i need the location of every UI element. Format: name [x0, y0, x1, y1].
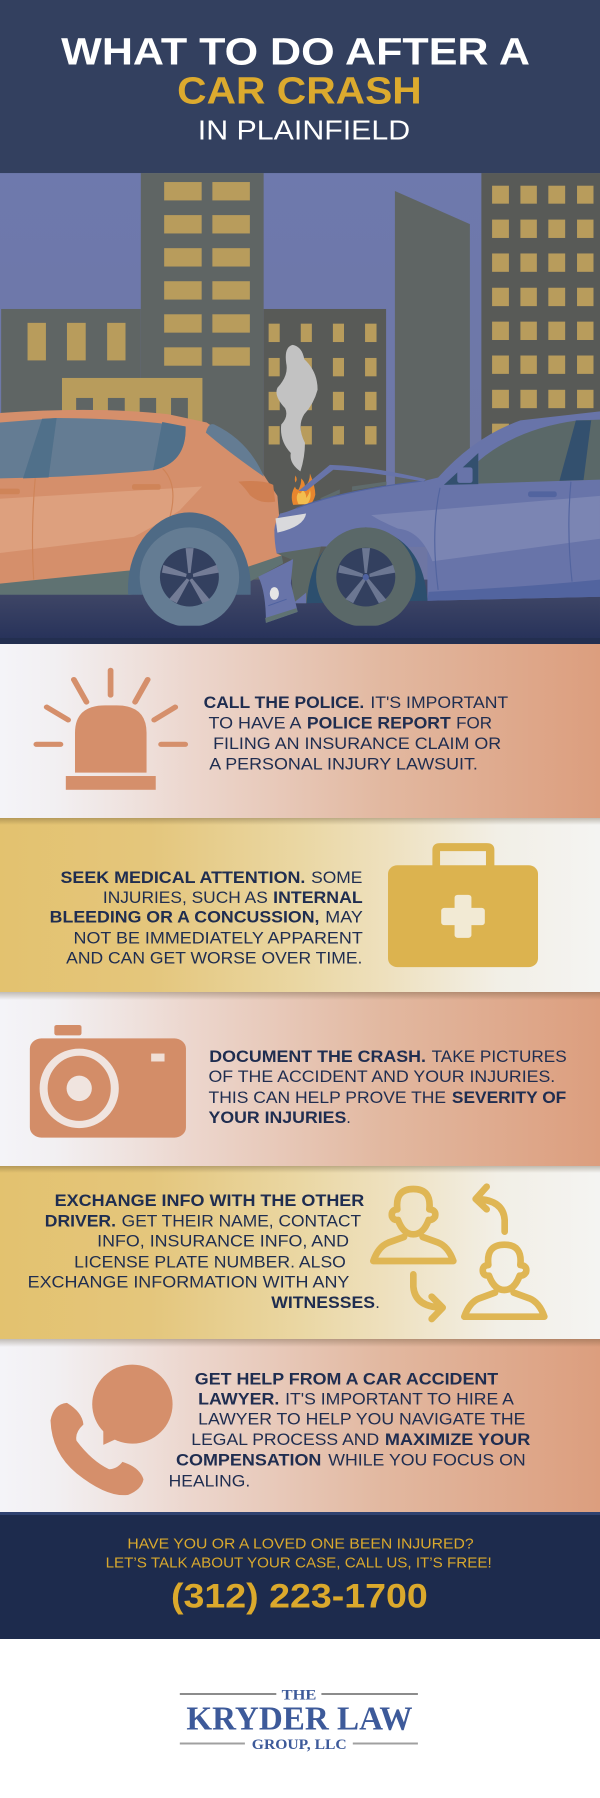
icon: police siren [36, 670, 185, 790]
text: get help from a lawyer: LEGAL PROCESS AND [191, 1431, 379, 1449]
text: call to action: HAVE YOU OR A LOVED ONE BEEN INJURED? [127, 1536, 474, 1553]
icon: phone and speech bubble [51, 1365, 173, 1495]
phone number: (312) 223-1700 [171, 1578, 428, 1616]
text: document the crash: DOCUMENT THE CRASH. [209, 1048, 426, 1066]
text: call the police [204, 694, 508, 774]
road edge strip [0, 638, 600, 645]
law firm logo: THE [282, 1688, 316, 1704]
text: get help from a lawyer: LAWYER TO HELP YOU NAVIGATE THE [198, 1410, 525, 1428]
icon: first aid kit [388, 843, 538, 967]
law firm logo: GROUP, LLC [252, 1737, 347, 1753]
text: seek medical attention: INTERNAL [273, 889, 363, 907]
text: exchange info [28, 1192, 380, 1312]
text: call the police: CALL THE POLICE. [204, 694, 364, 712]
road [0, 580, 600, 640]
icon: two people exchanging info [373, 1187, 544, 1319]
text: seek medical attention: SEEK MEDICAL ATTENTION. [60, 869, 305, 887]
panel: get help from a lawyer [0, 1339, 600, 1512]
orange car wheel [140, 527, 239, 627]
text: get help from a lawyer: GET HELP FROM A CAR ACCIDENT [195, 1371, 498, 1389]
law firm logo: KRYDER LAW [186, 1701, 412, 1738]
text: document the crash: YOUR INJURIES [208, 1109, 346, 1127]
text: exchange info: LICENSE PLATE NUMBER. ALSO [74, 1253, 346, 1271]
text: get help from a lawyer: WHILE YOU FOCUS ON [328, 1452, 526, 1470]
text: call the police: FILING AN INSURANCE CLAIM OR [213, 735, 501, 753]
call to action footer [0, 1512, 600, 1639]
title line: what to do after a: WHAT TO DO AFTER A [61, 32, 530, 74]
title line: car crash: CAR CRASH [177, 71, 422, 113]
text: get help from a lawyer [169, 1371, 530, 1491]
text: seek medical attention [50, 869, 363, 967]
text: get help from a lawyer: MAXIMIZE YOUR [385, 1431, 530, 1449]
text: exchange info: EXCHANGE INFORMATION WITH ANY [28, 1273, 349, 1291]
text: seek medical attention: MAY [325, 909, 363, 927]
text: exchange info: INFO, INSURANCE INFO, AND [97, 1232, 349, 1250]
text: call the police: POLICE REPORT [307, 714, 451, 732]
text: document the crash: TAKE PICTURES [432, 1048, 567, 1066]
law firm logo [0, 1639, 600, 1798]
text: document the crash: THIS CAN HELP PROVE THE [208, 1089, 446, 1107]
text: document the crash: SEVERITY OF [452, 1089, 566, 1107]
text: seek medical attention: NOT BE IMMEDIATELY APPARENT [74, 929, 363, 947]
panel: call the police [0, 644, 600, 818]
text: document the crash [208, 1048, 567, 1127]
text: call the police: TO HAVE A [208, 714, 302, 732]
text: exchange info: . [375, 1294, 380, 1312]
text: document the crash: OF THE ACCIDENT AND YOUR INJURIES. [208, 1068, 555, 1086]
buildings and windows [1, 173, 600, 598]
text: document the crash: . [346, 1109, 351, 1127]
text: seek medical attention: BLEEDING OR A CONCUSSION, [50, 909, 319, 927]
text: seek medical attention: INJURIES, SUCH AS [103, 889, 268, 907]
illustration: city car crash scene [0, 173, 600, 640]
text: call the police: IT'S IMPORTANT [370, 694, 508, 712]
text: exchange info: WITNESSES [271, 1294, 375, 1312]
panel: exchange info [0, 1166, 600, 1339]
text: seek medical attention: SOME [311, 869, 362, 887]
text: seek medical attention: AND CAN GET WORSE OVER TIME. [66, 949, 362, 967]
flames [292, 473, 315, 505]
text: get help from a lawyer: HEALING. [169, 1473, 250, 1491]
smoke [276, 345, 318, 471]
text: exchange info: EXCHANGE INFO WITH THE OTHER [55, 1192, 364, 1210]
subtitle: in plainfield: IN PLAINFIELD [198, 115, 410, 146]
blue car wheel [316, 527, 416, 627]
text: get help from a lawyer: IT'S IMPORTANT TO HIRE A [285, 1390, 514, 1408]
orange car [0, 410, 283, 627]
text: call the police: A PERSONAL INJURY LAWSUIT. [209, 756, 478, 774]
text: call us free: LET’S TALK ABOUT YOUR CASE, CALL US, IT’S FREE! [106, 1555, 492, 1572]
text: exchange info: DRIVER. [45, 1212, 116, 1230]
header banner [0, 0, 600, 174]
text: get help from a lawyer: LAWYER. [198, 1390, 279, 1408]
text: exchange info: GET THEIR NAME, CONTACT [122, 1212, 361, 1230]
text: get help from a lawyer: COMPENSATION [176, 1452, 321, 1470]
panel: document the crash [0, 992, 600, 1166]
text: call the police: FOR [456, 714, 492, 732]
road foreground [0, 626, 600, 640]
panel: seek medical attention [0, 818, 600, 992]
blue car [274, 411, 600, 627]
icon: camera [30, 1025, 186, 1138]
broken bumper [258, 559, 298, 623]
